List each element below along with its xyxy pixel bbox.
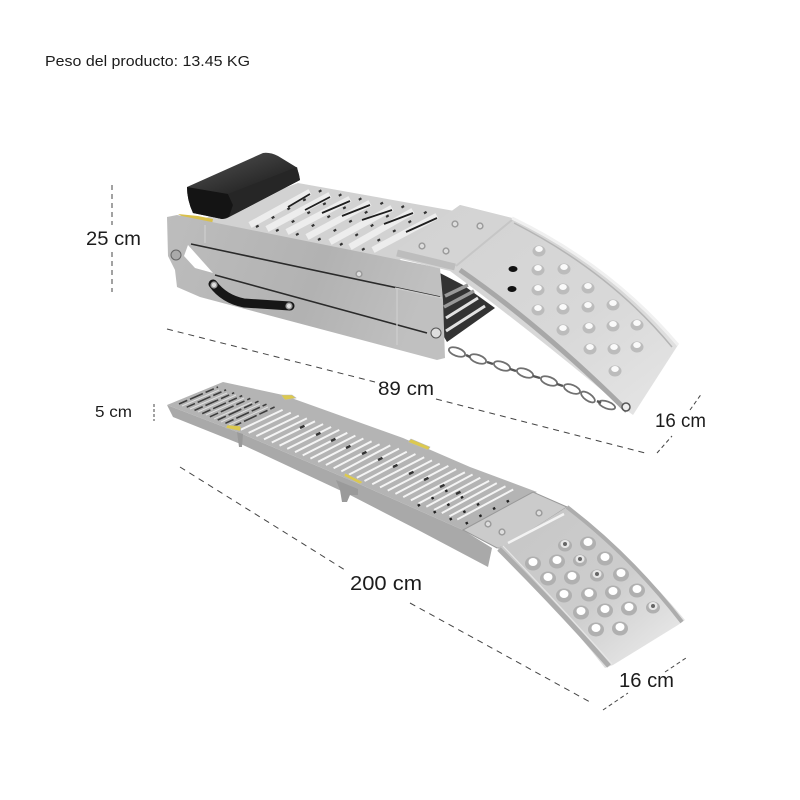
folded deck top surface [200, 183, 460, 262]
dimension: unfolded length 200 cm: 200 cm [350, 573, 422, 595]
hinge rivets [484, 509, 543, 536]
hinge plate [463, 492, 567, 548]
dimension: folded height 25 cm: 25 cm [86, 229, 141, 250]
gap between rails [184, 245, 213, 273]
dimension: folded height 25 cm [86, 185, 141, 292]
folded ramp product [167, 153, 678, 415]
long side face [167, 405, 492, 567]
frame seams and plate edges [191, 244, 440, 333]
deployed ramp surface [397, 205, 678, 415]
bolts [171, 250, 441, 338]
dimension: unfolded length 200 cm [180, 467, 590, 702]
white slots [241, 410, 513, 520]
deployed ramp surface [497, 507, 685, 668]
ramp rims [499, 507, 682, 666]
yellow hinge stickers [226, 395, 430, 484]
handle [213, 284, 290, 306]
dimension: folded width 16 cm: 16 cm [655, 411, 706, 432]
long deck surface [167, 382, 537, 530]
text: product weight: Peso del producto: 13.45 KG [45, 53, 250, 70]
hole rows [417, 489, 510, 525]
ramp perforations [525, 536, 660, 636]
dimension: folded length 89 cm [167, 329, 645, 453]
under-frame mechanism [438, 272, 495, 342]
hinge-plate rivets [418, 220, 484, 255]
dark slot details [300, 424, 461, 496]
deck slots [250, 190, 437, 250]
folding leg feet [237, 432, 358, 502]
dimension: unfolded height 5 cm: 5 cm [95, 404, 132, 421]
deck slots [179, 387, 513, 531]
lighter slots under the left section [182, 390, 268, 425]
dimension: unfolded height 5 cm [95, 404, 154, 421]
dimension: folded width 16 cm [655, 393, 706, 453]
dimension: folded length 89 cm: 89 cm [378, 379, 434, 400]
side frame [167, 215, 445, 360]
carrying pad [187, 153, 300, 219]
ramp perforations [508, 246, 644, 411]
unfolded ramp product [167, 382, 685, 668]
dark slots left section [179, 387, 275, 426]
hinge plate [397, 205, 512, 268]
dimension: unfolded width 16 cm: 16 cm [619, 670, 674, 692]
yellow sticker [178, 214, 213, 224]
chain [448, 345, 616, 411]
dimension: unfolded width 16 cm [603, 658, 686, 710]
ramp inner panel and rims [397, 218, 678, 411]
infographic canvas [46, 55, 705, 710]
